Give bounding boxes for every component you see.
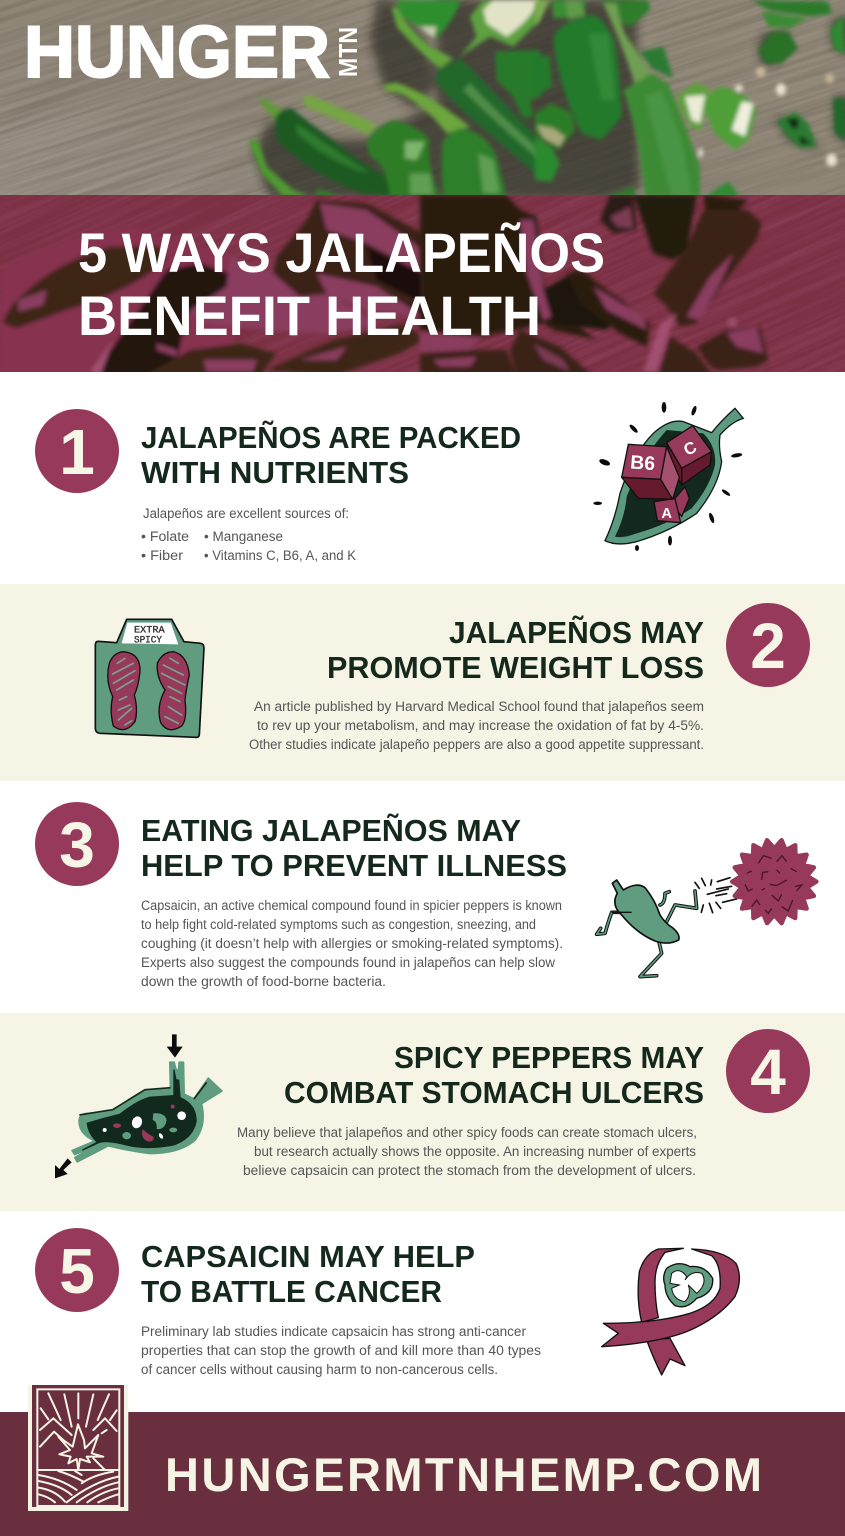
- heading 2: JALAPEÑOS MAY: [449, 615, 704, 650]
- panel: section 3 illness: [35, 802, 816, 989]
- footer band: [0, 1385, 845, 1536]
- heading 2: [327, 615, 704, 685]
- icon: extra spicy scale: SPICY: [134, 635, 162, 646]
- number badge 1: [35, 409, 119, 493]
- icon: stomach shaped pepper: [55, 1034, 222, 1178]
- panel: section 1 nutrients: [35, 402, 743, 563]
- number badge 4: 4: [750, 1036, 786, 1108]
- text: ulcers body: believe capsaicin can protect the stomach from the development of ulcers.: [243, 1163, 696, 1178]
- heading 4: SPICY PEPPERS MAY: [394, 1040, 704, 1075]
- text: nutrient list: • Fiber: [141, 548, 184, 563]
- text: illness body: Experts also suggest the compounds found in jalapeños can help slow: [141, 955, 555, 970]
- text: nutrient list: • Manganese: [204, 529, 283, 544]
- number badge 2: 2: [750, 610, 786, 682]
- text: illness body: coughing (it doesn’t help with allergies or smoking-related symptoms).: [141, 936, 563, 951]
- icon: extra spicy scale: EXTRA: [134, 625, 165, 636]
- text: cancer body: [141, 1324, 541, 1377]
- number badge 1: 1: [59, 416, 95, 488]
- icon: pepper with vitamin cubes: B6: [630, 452, 656, 475]
- heading 1: WITH NUTRIENTS: [141, 455, 409, 490]
- text: illness body: [141, 898, 563, 989]
- hero photo: jalapeños on wood: [0, 0, 845, 372]
- title: [78, 221, 605, 347]
- text: weight loss body: [249, 699, 704, 752]
- panel: section 5 cancer: [35, 1228, 739, 1377]
- heading 4: [284, 1040, 704, 1110]
- text: nutrient list: Jalapeños are excellent sources of:: [143, 506, 349, 521]
- number badge 3: [35, 802, 119, 886]
- heading 3: EATING JALAPEÑOS MAY: [141, 813, 521, 848]
- icon: pepper with vitamin cubes: C: [680, 437, 700, 460]
- heading 5: TO BATTLE CANCER: [141, 1274, 442, 1309]
- heading 1: JALAPEÑOS ARE PACKED: [141, 420, 521, 455]
- heading 2: PROMOTE WEIGHT LOSS: [327, 650, 704, 685]
- text: illness body: to help fight cold-related symptoms such as congestion, sneezing, and: [141, 917, 536, 932]
- text: nutrient list: [141, 506, 356, 563]
- number badge 4: [726, 1029, 810, 1113]
- number badge 5: [35, 1228, 119, 1312]
- text: weight loss body: An article published by Harvard Medical School found that jalapeños seem: [254, 699, 704, 714]
- text: nutrient list: • Vitamins C, B6, A, and K: [204, 548, 356, 563]
- website url: HUNGERMTNHEMP.COM: [165, 1448, 762, 1501]
- text: nutrient list: • Folate: [141, 529, 189, 544]
- heading 3: HELP TO PREVENT ILLNESS: [141, 848, 567, 883]
- footer logo: mountain, leaf and fields: [28, 1385, 128, 1511]
- text: illness body: down the growth of food-borne bacteria.: [141, 974, 386, 989]
- panel: section 4 ulcers: [0, 1013, 845, 1211]
- heading 4: COMBAT STOMACH ULCERS: [284, 1075, 704, 1110]
- title: BENEFIT HEALTH: [78, 284, 541, 347]
- text: cancer body: Preliminary lab studies indicate capsaicin has strong anti-cancer: [141, 1324, 526, 1339]
- text: illness body: Capsaicin, an active chemical compound found in spicier peppers is known: [141, 898, 562, 913]
- number badge 3: 3: [59, 809, 95, 881]
- icon: ribbon with pepper slice: [602, 1248, 739, 1375]
- text: ulcers body: [237, 1125, 697, 1178]
- heading 3: [141, 813, 567, 883]
- heading 5: CAPSAICIN MAY HELP: [141, 1239, 475, 1274]
- icon: extra spicy scale: [95, 619, 204, 737]
- text: ulcers body: but research actually shows the opposite. An increasing number of experts: [254, 1144, 696, 1159]
- logo: Hunger MTN: MTN: [333, 27, 363, 77]
- text: cancer body: properties that can stop the growth of and kill more than 40 types: [141, 1343, 541, 1358]
- icon: pepper with vitamin cubes: [593, 402, 743, 551]
- title: 5 WAYS JALAPEÑOS: [78, 221, 605, 284]
- heading 5: [141, 1239, 475, 1309]
- text: weight loss body: Other studies indicate jalapeño peppers are also a good appetite suppressant.: [249, 737, 704, 752]
- number badge 2: [726, 603, 810, 687]
- icon: pepper kicking germ: [597, 840, 816, 977]
- icon: pepper with vitamin cubes: A: [661, 506, 672, 522]
- text: cancer body: of cancer cells without causing harm to non-cancerous cells.: [141, 1362, 498, 1377]
- heading 1: [141, 420, 521, 490]
- text: weight loss body: to rev up your metabolism, and may increase the oxidation of fat by 4-5%.: [257, 718, 704, 733]
- logo: Hunger MTN: HUNGER: [24, 12, 330, 93]
- text: ulcers body: Many believe that jalapeños and other spicy foods can create stomach ulcers,: [237, 1125, 697, 1140]
- number badge 5: 5: [59, 1235, 95, 1307]
- panel: section 2 weight loss: [0, 584, 845, 781]
